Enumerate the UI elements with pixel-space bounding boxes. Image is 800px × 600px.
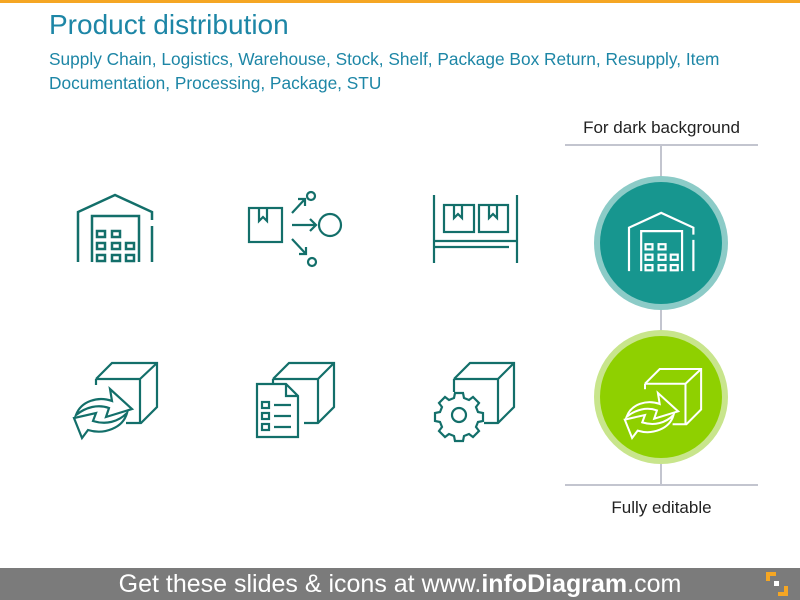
footer logo bbox=[766, 572, 788, 596]
top accent line bbox=[0, 0, 800, 3]
icon: package return bbox=[74, 363, 157, 438]
title: Product distribution bbox=[49, 9, 289, 40]
subtitle: Supply Chain, Logistics, Warehouse, Stock, Shelf, Package Box Return, Resupply, Item Documentation, Processing, Package, STU bbox=[49, 49, 719, 93]
icon: package documentation bbox=[257, 363, 334, 437]
circle: dark teal bbox=[594, 176, 728, 310]
footer bbox=[0, 568, 800, 600]
label: fully editable: Fully editable bbox=[611, 498, 712, 517]
icon: distribution box arrows bbox=[249, 192, 341, 266]
label: for dark background: For dark background bbox=[583, 118, 740, 137]
connector lines bbox=[565, 145, 758, 485]
circle: green bbox=[594, 330, 728, 464]
icon: warehouse bbox=[78, 195, 152, 262]
icon: package processing gear bbox=[435, 363, 514, 441]
icon: shelf with boxes bbox=[434, 195, 517, 263]
footer: Get these slides & icons at www.infoDiagram.com bbox=[119, 570, 681, 598]
